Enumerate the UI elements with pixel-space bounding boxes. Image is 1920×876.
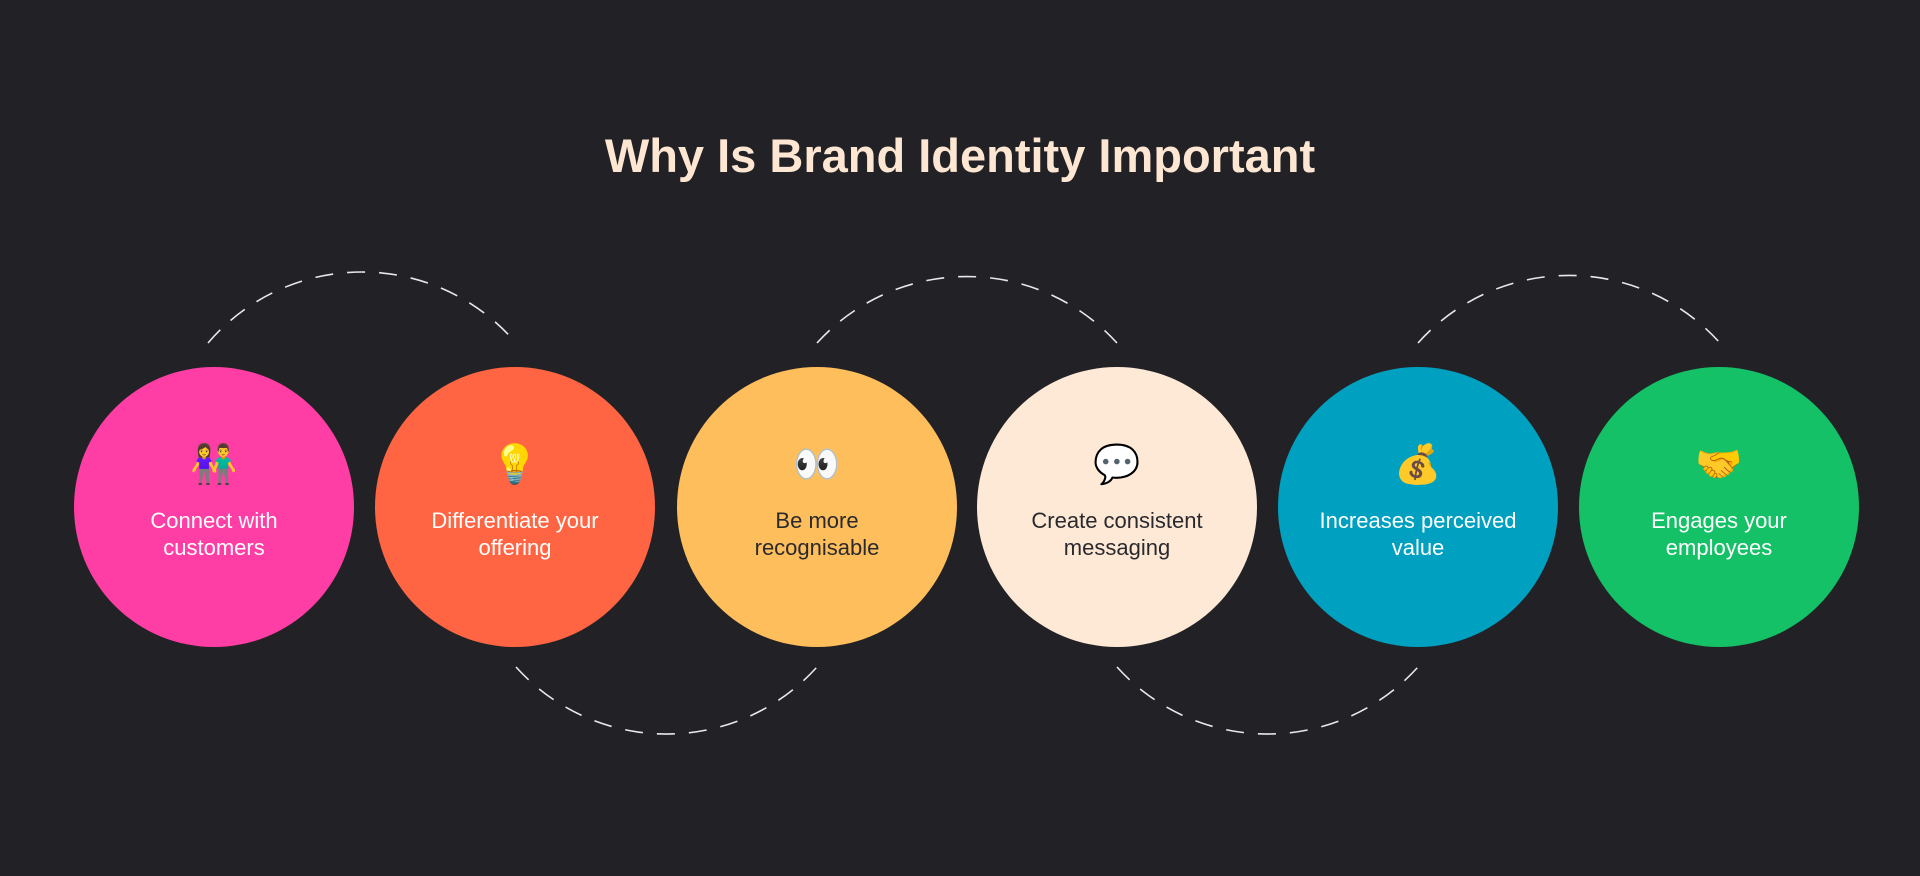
icon: eyes: 👀 xyxy=(793,444,841,486)
icon: speech bubble: 💬 xyxy=(1093,444,1141,486)
label: Differentiate your xyxy=(431,508,599,533)
label xyxy=(431,508,599,560)
circle: be more recognisable xyxy=(677,367,957,647)
label: Create consistent xyxy=(1031,508,1203,533)
circle: increases perceived value xyxy=(1278,367,1558,647)
label: value xyxy=(1392,535,1444,560)
label xyxy=(1031,508,1203,560)
label: employees xyxy=(1666,535,1772,560)
label: Increases perceived xyxy=(1320,508,1516,533)
label xyxy=(1651,508,1787,560)
label: Connect with xyxy=(150,508,278,533)
label: messaging xyxy=(1064,535,1170,560)
label xyxy=(755,508,879,560)
label: customers xyxy=(163,535,265,560)
icon: money bag: 💰 xyxy=(1394,444,1442,486)
circle: create consistent messaging xyxy=(977,367,1257,647)
circle: differentiate your offering xyxy=(375,367,655,647)
label xyxy=(1320,508,1516,560)
label: offering xyxy=(478,535,551,560)
label xyxy=(150,508,278,560)
title: Why Is Brand Identity Important xyxy=(605,129,1315,182)
circle: engages your employees xyxy=(1579,367,1859,647)
label: Be more xyxy=(775,508,859,533)
icon: couple: 👫 xyxy=(190,444,238,486)
icon: light bulb: 💡 xyxy=(491,444,539,486)
label: recognisable xyxy=(755,535,879,560)
label: Engages your xyxy=(1651,508,1787,533)
icon: handshake: 🤝 xyxy=(1695,444,1743,486)
circle: connect with customers xyxy=(74,367,354,647)
